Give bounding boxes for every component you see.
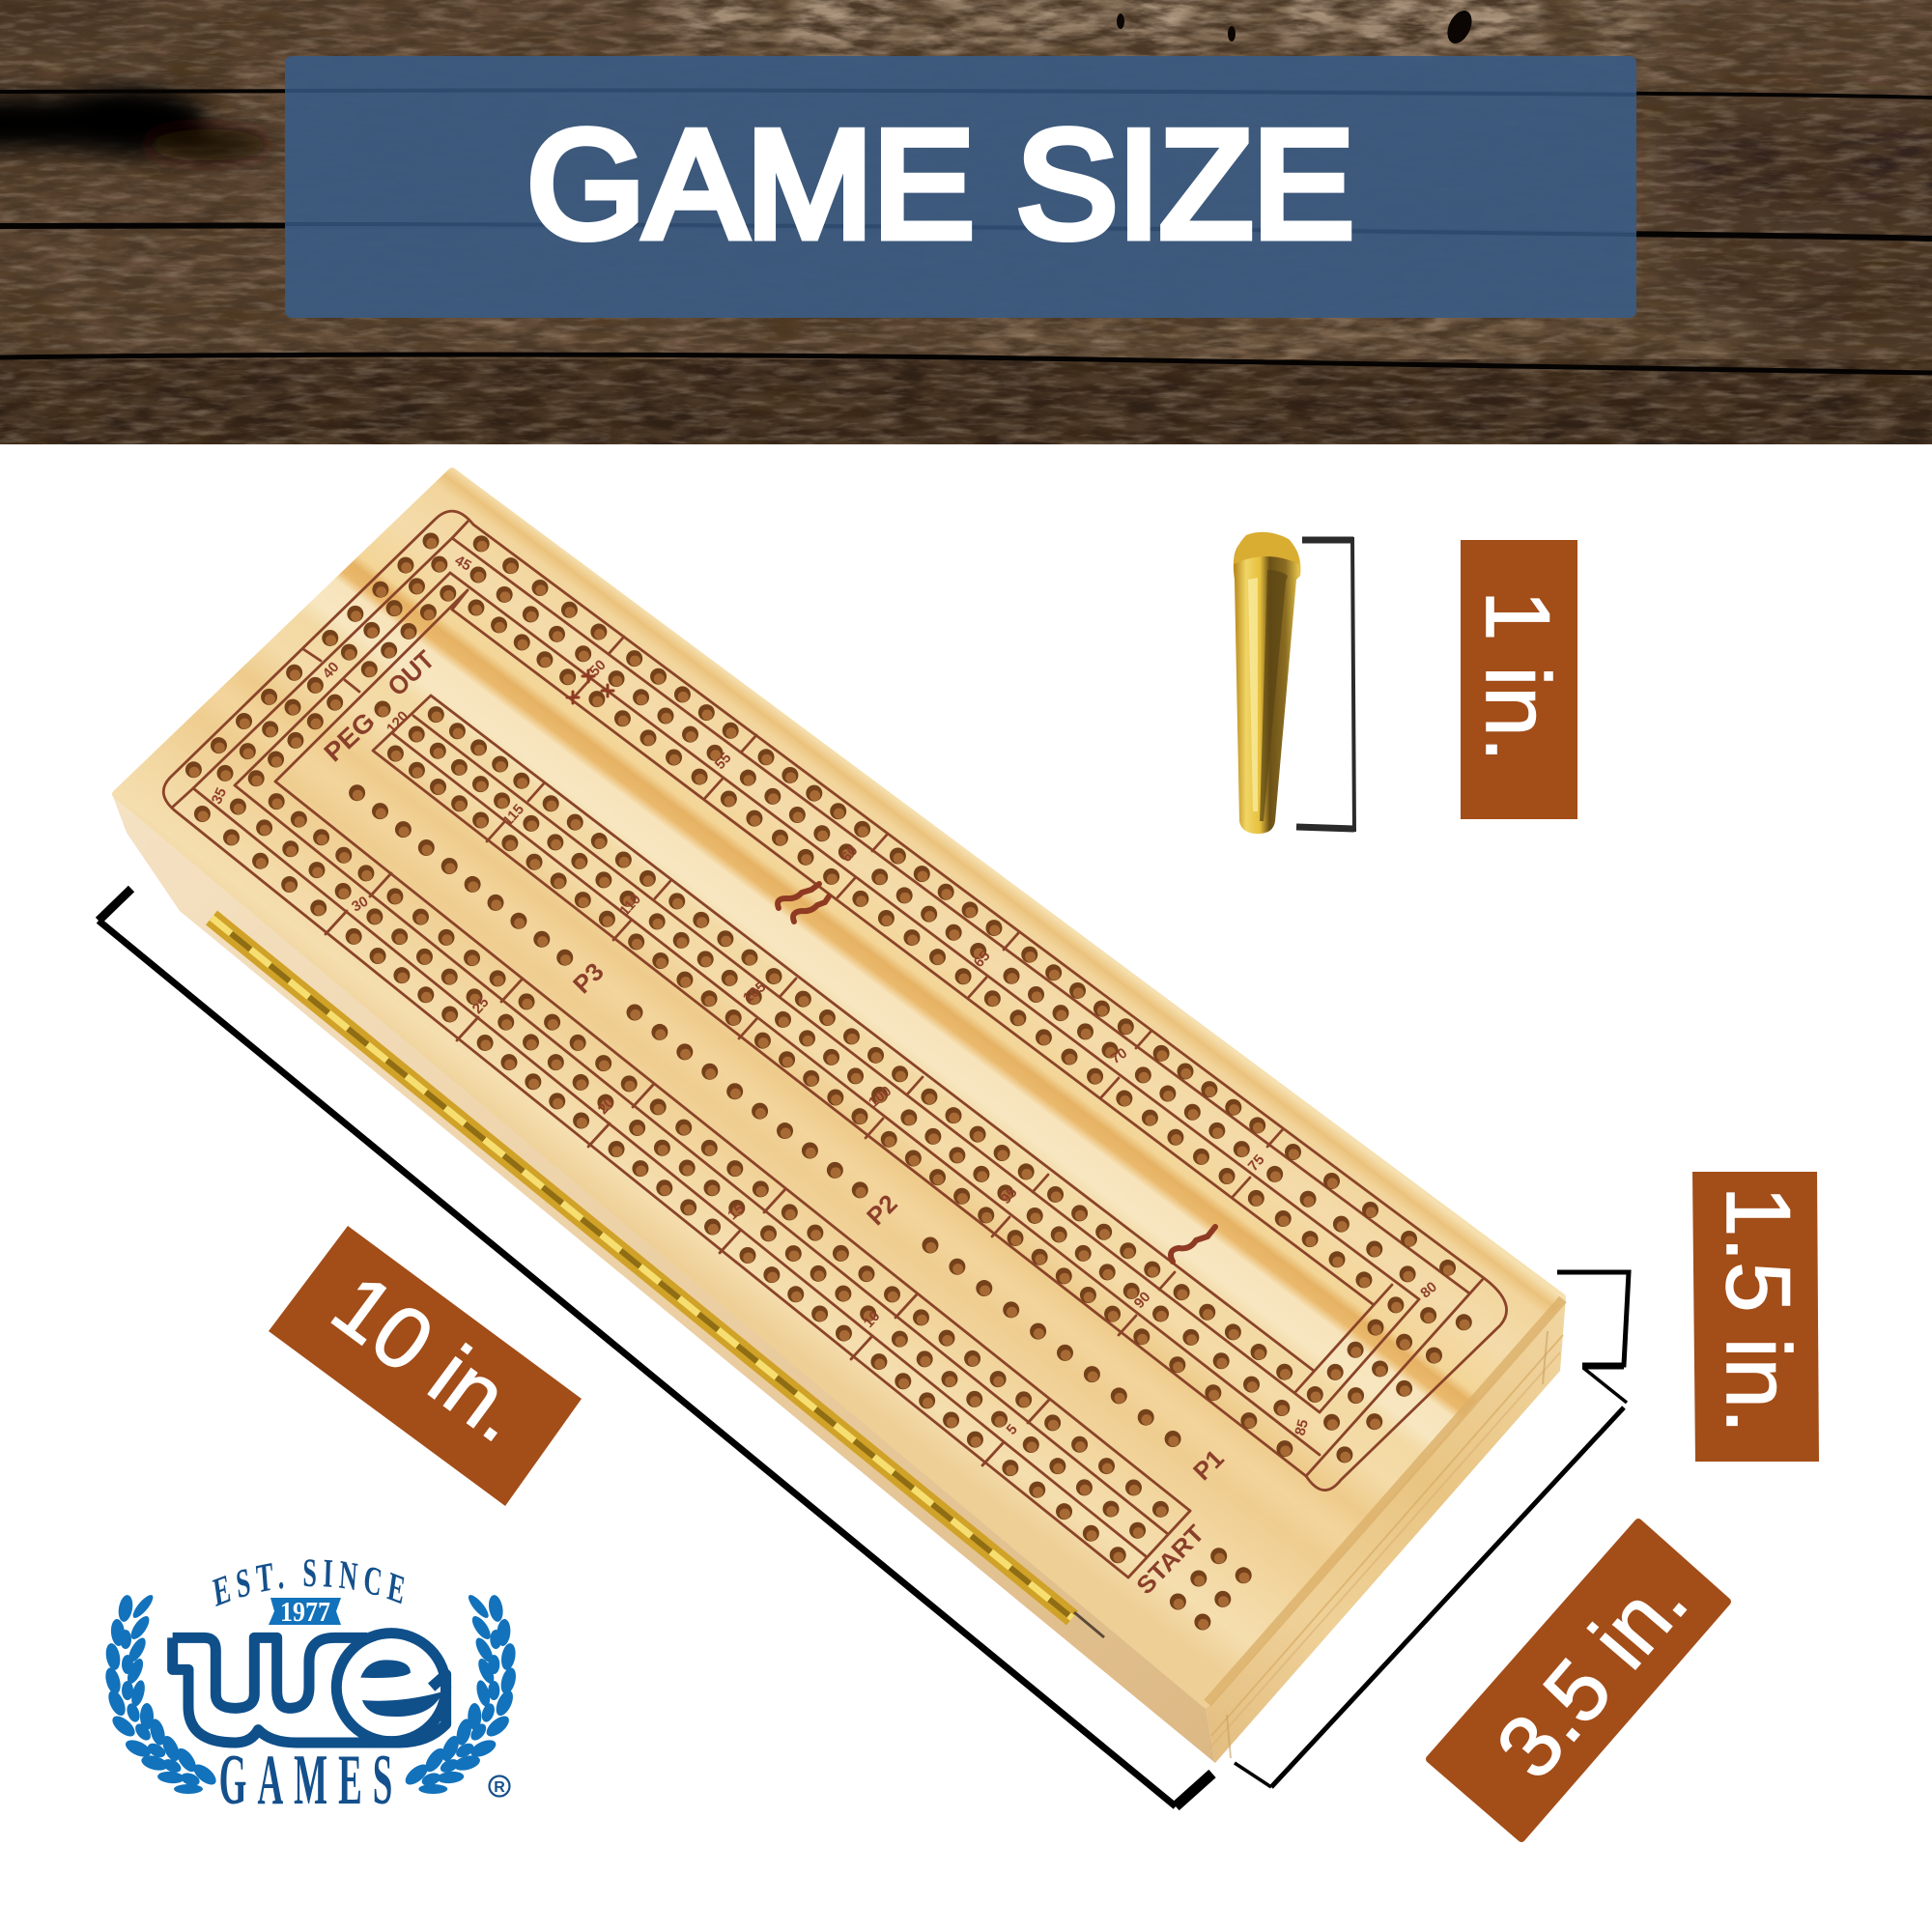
track score numbers: 15	[724, 1201, 748, 1223]
track score numbers: 20	[595, 1094, 618, 1118]
track score numbers: 75	[1245, 1151, 1268, 1175]
track score numbers: 10	[861, 1308, 884, 1331]
right end face	[1206, 1297, 1566, 1763]
engraved track lines	[163, 511, 1507, 1577]
label: 10 in.: 10 in.	[315, 1257, 543, 1461]
logo laurel wreath	[103, 1592, 519, 1794]
track score numbers: 60	[838, 842, 862, 866]
label: 1 in.: 1 in.	[1467, 590, 1569, 762]
board lettering: START	[1131, 1520, 1209, 1600]
track score numbers: 95	[998, 1184, 1021, 1208]
engraved ornaments	[567, 670, 1215, 1262]
board lettering: OUT	[383, 644, 440, 701]
gold peg	[1234, 532, 1300, 834]
brass hinge	[212, 918, 1104, 1637]
track score numbers: 105	[740, 979, 769, 1007]
peg holes	[193, 539, 1464, 1624]
front hinge face	[112, 794, 1215, 1763]
label: 1.5 in.: 1.5 in.	[1708, 1186, 1809, 1434]
track score numbers: 70	[1108, 1045, 1130, 1067]
track score numbers: 50	[586, 657, 610, 680]
track score numbers: 120	[384, 708, 412, 737]
track score numbers: 45	[452, 553, 474, 575]
track score numbers: 85	[1292, 1418, 1312, 1437]
track score numbers: 110	[616, 891, 644, 920]
logo games: GAMES	[219, 1740, 403, 1819]
cribbage board box	[112, 471, 1566, 1763]
dimension bracket: height	[1557, 1272, 1629, 1366]
track score numbers: 30	[349, 894, 371, 916]
title: GAME SIZE	[527, 99, 1354, 270]
track score numbers: 115	[499, 801, 527, 830]
logo registered mark: R	[494, 1779, 505, 1796]
label: 1.5 in.	[1692, 1172, 1819, 1462]
dimension bracket: length	[99, 889, 1212, 1806]
dark knot	[0, 86, 270, 160]
WE Games logo	[105, 1559, 516, 1819]
top face of board	[116, 471, 1562, 1704]
board lettering: P3	[567, 957, 610, 999]
dimension bracket: peg	[1296, 537, 1354, 832]
track score numbers: 100	[866, 1083, 895, 1111]
board lettering: P1	[1187, 1444, 1230, 1486]
dark lower plank	[0, 359, 1932, 444]
logo 1977 ribbon: 1977	[280, 1598, 330, 1628]
track score numbers: 35	[209, 785, 230, 807]
board lettering: PEG	[319, 707, 381, 767]
header: rustic wood planks	[0, 0, 1932, 444]
logo registered mark	[489, 1776, 510, 1797]
board lettering: P2	[861, 1189, 903, 1231]
board lettering	[319, 644, 1230, 1600]
title banner	[285, 56, 1636, 318]
label: 1 in.	[1461, 540, 1577, 819]
dimension bracket: width	[1235, 1368, 1627, 1787]
track score numbers: 40	[320, 659, 343, 682]
track score numbers: 90	[1131, 1289, 1154, 1312]
label: 10 in.	[269, 1226, 582, 1506]
logo est. since: EST. SINCE	[213, 1559, 404, 1606]
track score numbers: 80	[1417, 1279, 1440, 1301]
track score numbers: 5	[1004, 1421, 1021, 1438]
track score numbers: 25	[469, 994, 493, 1017]
track score numbers: 65	[971, 948, 994, 971]
label: 3.5 in.: 3.5 in.	[1479, 1553, 1706, 1797]
label: 3.5 in.	[1430, 1522, 1727, 1838]
logo we wordmark	[173, 1634, 446, 1743]
track score numbers	[209, 553, 1440, 1438]
chamfered edge	[1208, 1299, 1563, 1703]
track score numbers: 55	[712, 750, 735, 773]
